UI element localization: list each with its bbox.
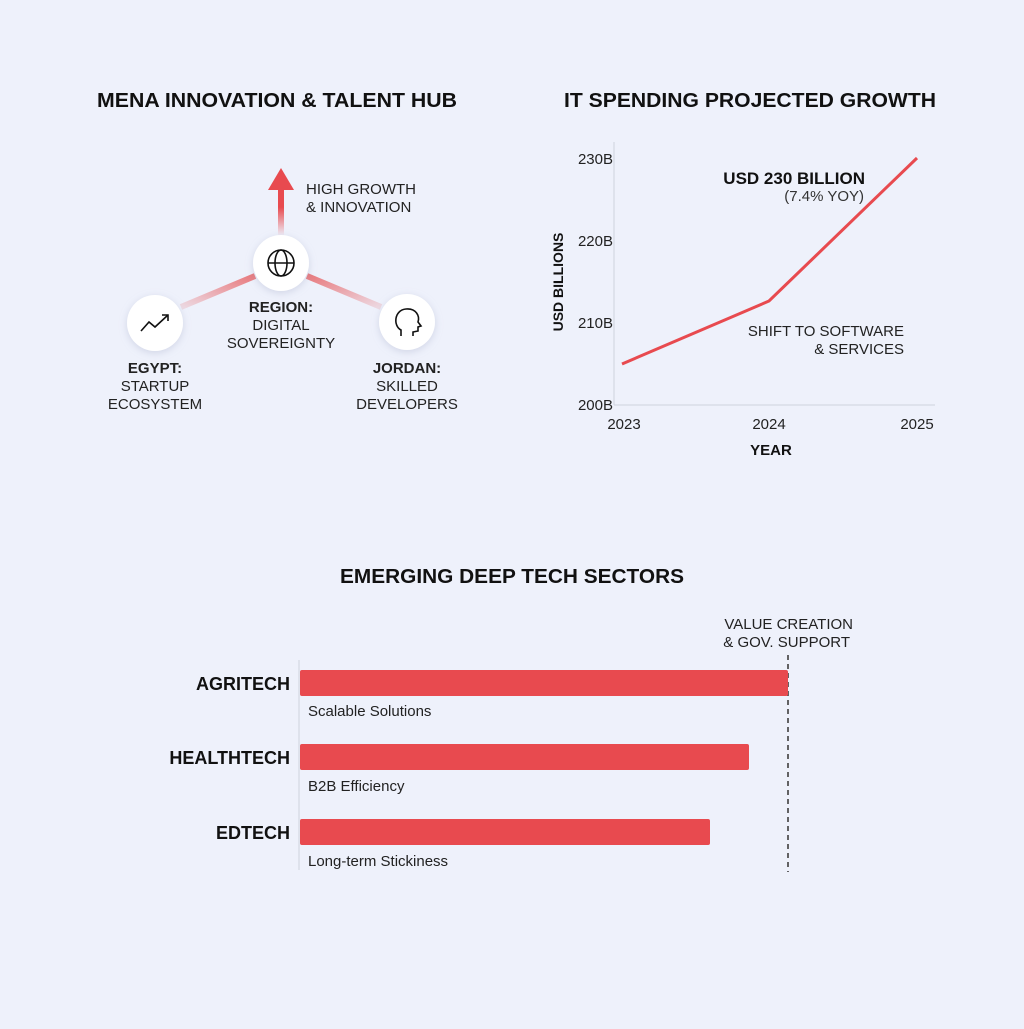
node: jordan head icon <box>379 294 435 350</box>
annotation: shift to software: SHIFT TO SOFTWARE <box>748 323 904 340</box>
label: region: REGION: <box>249 299 313 316</box>
node: region globe <box>253 235 309 291</box>
bar chart: sectors <box>169 616 853 872</box>
line chart: IT spending <box>550 142 935 459</box>
label: egypt: ECOSYSTEM <box>108 396 202 413</box>
label: high growth: & INNOVATION <box>306 199 411 216</box>
line chart: IT spending: USD BILLIONS <box>550 233 566 331</box>
annotation: value creation: VALUE CREATION <box>724 616 853 633</box>
label: egypt: STARTUP <box>121 378 189 395</box>
bar: edtech: Long-term Stickiness <box>308 853 448 870</box>
diagram: hub network <box>108 168 458 413</box>
title: MENA innovation hub: MENA INNOVATION & TALENT HUB <box>97 90 457 112</box>
annotation: value creation: & GOV. SUPPORT <box>723 634 850 651</box>
annotation: 230 billion: USD 230 BILLION <box>723 169 865 188</box>
line chart: IT spending: YEAR <box>750 442 792 459</box>
line chart: IT spending: 2024 <box>752 416 786 433</box>
label: region: SOVEREIGNTY <box>227 335 335 352</box>
bar: healthtech: HEALTHTECH <box>169 748 290 768</box>
label: egypt: EGYPT: <box>128 360 182 377</box>
bar: agritech: AGRITECH <box>196 674 290 694</box>
label: jordan: JORDAN: <box>373 360 441 377</box>
annotation: 230 billion: (7.4% YOY) <box>784 188 864 205</box>
bar: healthtech <box>169 744 749 795</box>
bar: healthtech: B2B Efficiency <box>308 778 405 795</box>
line chart: IT spending: 210B <box>578 315 613 332</box>
bar: edtech <box>216 819 710 870</box>
line chart: IT spending: 200B <box>578 397 613 414</box>
label: jordan: DEVELOPERS <box>356 396 458 413</box>
line chart: IT spending: 2023 <box>607 416 641 433</box>
line chart: IT spending: 220B <box>578 233 613 250</box>
label: region: DIGITAL <box>252 317 310 334</box>
node: egypt trend icon <box>127 295 183 351</box>
line chart: IT spending: 230B <box>578 151 613 168</box>
title: deep tech sectors: EMERGING DEEP TECH SECTORS <box>340 566 684 588</box>
bar: agritech <box>196 670 788 720</box>
label: jordan: SKILLED <box>376 378 438 395</box>
line chart: IT spending: 2025 <box>900 416 934 433</box>
bar: agritech: Scalable Solutions <box>308 703 431 720</box>
bar: edtech: EDTECH <box>216 823 290 843</box>
label: high growth: HIGH GROWTH <box>306 181 416 198</box>
annotation: shift to software: & SERVICES <box>814 341 904 358</box>
title: IT spending: IT SPENDING PROJECTED GROWTH <box>564 90 936 112</box>
arrow: high growth <box>268 168 294 236</box>
connector lines <box>181 276 381 307</box>
